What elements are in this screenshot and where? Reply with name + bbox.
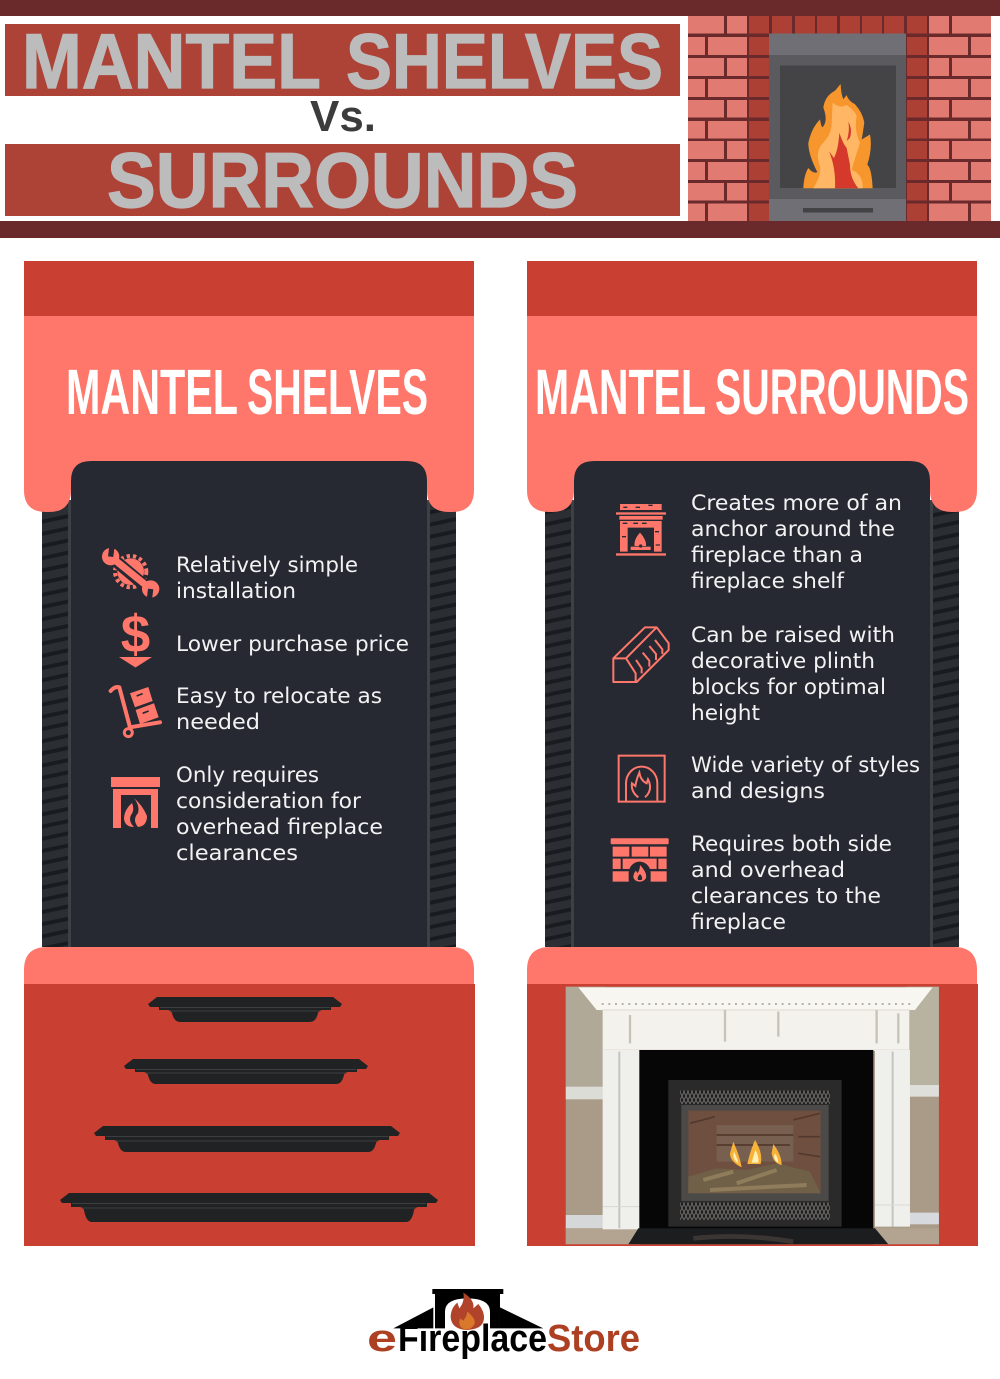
icon: dollar with down arrow: $ (121, 605, 150, 664)
logo: eFireplaceStore (367, 1289, 640, 1360)
icon: hand truck (111, 687, 160, 737)
panel: mantel shelves (24, 261, 475, 1246)
item text: anchor (691, 491, 902, 594)
item text: anchor: anchor around the (691, 517, 895, 542)
dark content column (574, 461, 930, 947)
title connector: Vs.: Vs. (310, 92, 376, 141)
logo icon: fireplace with flame and roof (393, 1289, 543, 1330)
base ledge (24, 947, 474, 984)
header band: top (0, 0, 1000, 16)
icon: framed arch flame (619, 756, 665, 802)
item text: overhead clearances: overhead fireplace (176, 815, 383, 840)
item text: plinth blocks: Can be raised with (691, 623, 895, 648)
inner dark bricks (749, 16, 927, 221)
icon: plinth block (613, 627, 669, 682)
product: four black floating shelves (60, 997, 438, 1222)
dark content column (71, 461, 427, 947)
base block (24, 984, 475, 1246)
item text: overhead clearances: clearances (176, 841, 298, 866)
item text: anchor: fireplace shelf (691, 569, 844, 594)
item text: styles (691, 753, 920, 804)
icon: wrench and gear (102, 546, 159, 600)
title banner: Mantel Shelves: SHELVES (346, 17, 663, 105)
item text: plinth blocks: blocks for optimal (691, 675, 886, 700)
header block (24, 316, 474, 512)
title banner: Mantel Shelves: MANTEL (22, 17, 321, 105)
base block (527, 984, 978, 1246)
right bricks (929, 16, 991, 221)
side columns (545, 500, 959, 947)
title banner: Surrounds: SURROUNDS (107, 136, 578, 224)
logo wordmark: e (367, 1318, 397, 1360)
item text: side clearances: fireplace (691, 910, 786, 935)
item text: styles: Wide variety of styles (691, 753, 920, 778)
item text: simple installation (176, 553, 358, 604)
cap band (24, 261, 474, 316)
item text: simple installation: installation (176, 579, 296, 604)
icon: brick hearth (611, 838, 669, 882)
item text: easy to relocate (176, 684, 382, 735)
logo wordmark: Store (547, 1318, 640, 1360)
item text: plinth blocks (691, 623, 895, 726)
icon: simple fireplace (111, 777, 160, 828)
header block (527, 316, 977, 512)
item text: easy to relocate: Easy to relocate as (176, 684, 382, 709)
illustration: brick fireplace (688, 16, 991, 221)
photo: white mantel surround around gas fireplace (566, 987, 939, 1244)
item text: side clearances: clearances to the (691, 884, 881, 909)
logo wordmark: Fireplace (398, 1318, 547, 1360)
item text: anchor: Creates more of an (691, 491, 902, 516)
side columns (42, 500, 456, 947)
item text: overhead clearances: Only requires (176, 763, 319, 788)
left bricks (688, 16, 747, 221)
item text: overhead clearances (176, 763, 383, 866)
panel: mantel surrounds (527, 261, 978, 1246)
item text: plinth blocks: decorative plinth (691, 649, 875, 674)
item text: plinth blocks: height (691, 701, 760, 726)
base ledge (527, 947, 977, 984)
header band: bottom (0, 221, 1000, 238)
heading: SHELVES (247, 356, 428, 428)
item text: side clearances: and overhead (691, 858, 845, 883)
heading: MANTEL (66, 356, 238, 428)
cap band (527, 261, 977, 316)
item text: side clearances (691, 832, 892, 935)
item text: easy to relocate: needed (176, 710, 260, 735)
icon: brick fireplace with mantel (616, 504, 666, 556)
item text: anchor: fireplace than a (691, 543, 863, 568)
title banner: Mantel Shelves (5, 17, 680, 105)
item text: styles: and designs (691, 779, 825, 804)
heading (535, 356, 969, 428)
item text: simple installation: Relatively simple (176, 553, 358, 578)
item text: side clearances: Requires both side (691, 832, 892, 857)
logo wordmark (367, 1318, 640, 1360)
item text: overhead clearances: consideration for (176, 789, 361, 814)
item text: lower price: Lower purchase price (176, 632, 409, 657)
flame (803, 84, 873, 188)
heading: MANTEL (535, 356, 706, 428)
